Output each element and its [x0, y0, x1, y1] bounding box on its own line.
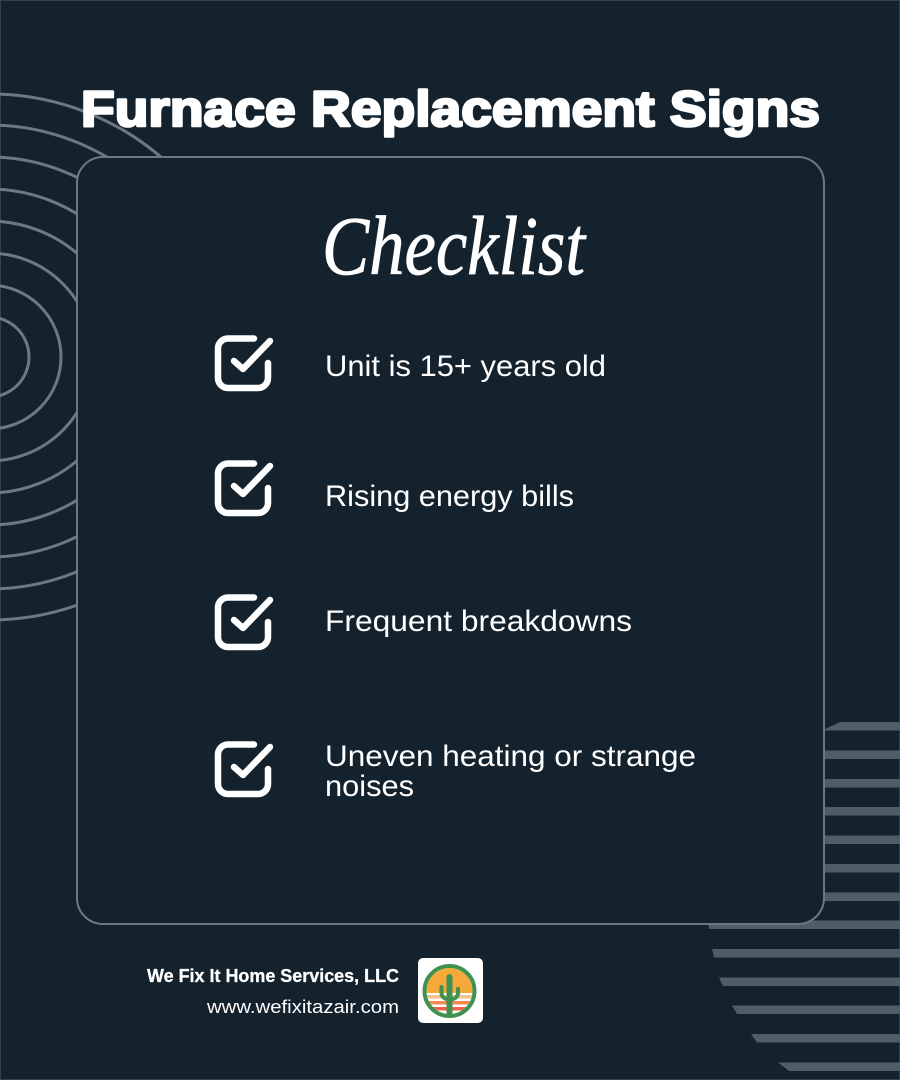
text: item 1: Unit is 15+ years old	[325, 350, 606, 383]
footer: website: www.wefixitazair.com	[206, 997, 399, 1017]
text: item 4	[325, 740, 696, 803]
text: item 4: noises	[325, 770, 414, 803]
panel: checklist card	[77, 157, 824, 924]
text: item 3: Frequent breakdowns	[325, 605, 632, 638]
text: item 4: Uneven heating or strange	[325, 740, 696, 773]
title: Furnace Replacement Signs	[81, 81, 820, 137]
decorative concentric rings	[0, 94, 253, 620]
icon: checkbox 3	[218, 598, 270, 647]
icon: checkbox 1	[218, 338, 270, 388]
text: item 2: Rising energy bills	[325, 480, 574, 513]
logo: cactus badge	[418, 958, 483, 1023]
icon: checkbox 2	[218, 464, 270, 513]
footer: company name: We Fix It Home Services, LLC	[147, 966, 399, 986]
decorative stripes	[708, 722, 900, 1071]
heading: Checklist: Checklist	[322, 200, 587, 293]
icon: checkbox 4	[218, 744, 270, 794]
